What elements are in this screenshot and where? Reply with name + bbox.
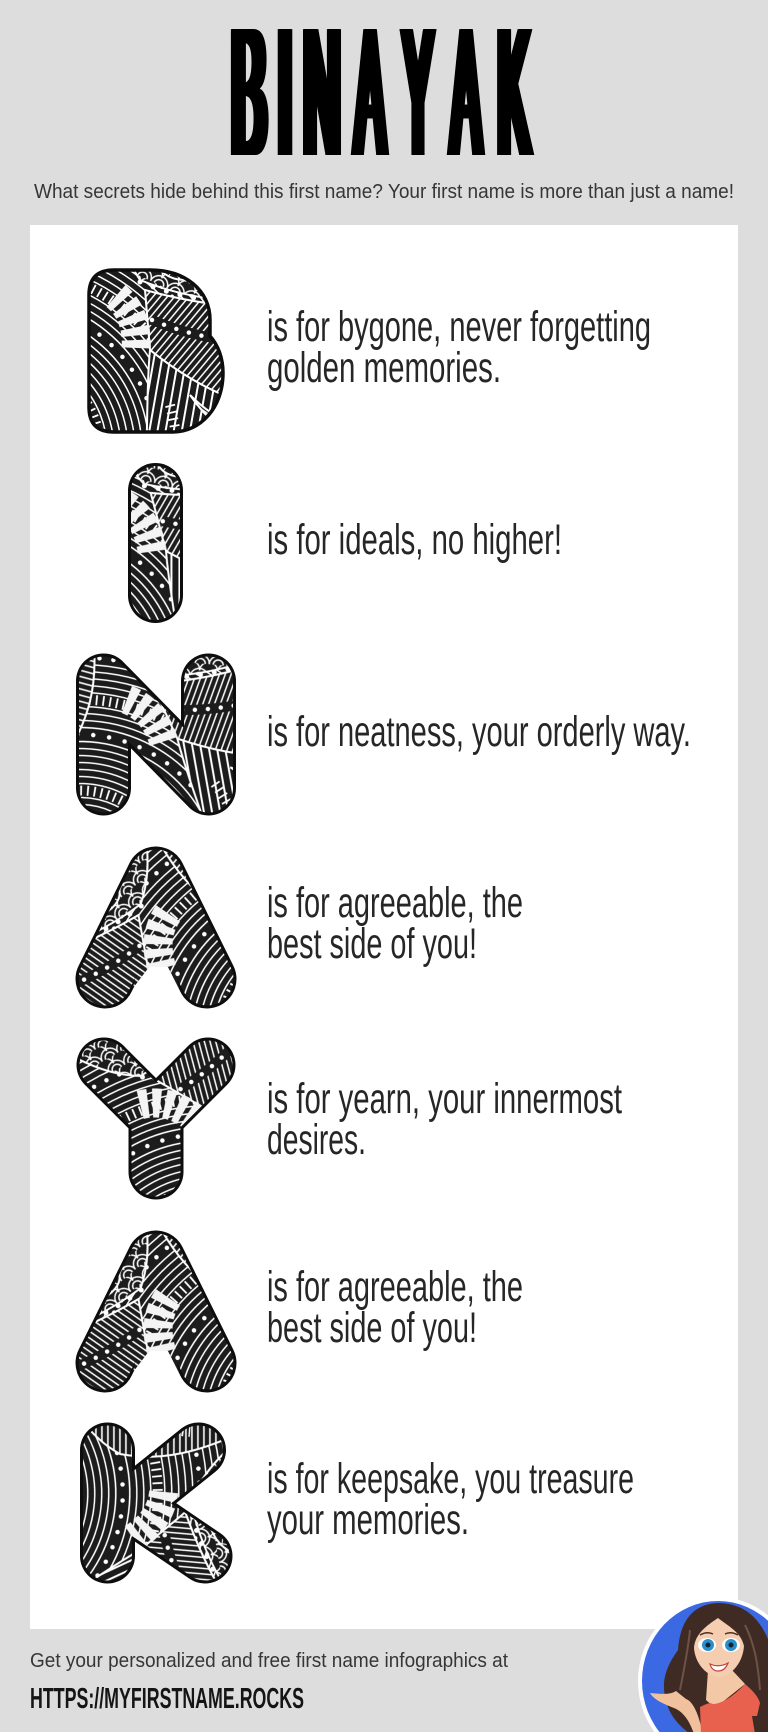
text: B line <box>267 303 651 392</box>
subtitle: What secrets hide behind this first name? Your first name is more than just a name! <box>34 181 734 203</box>
footer url: HTTPS://MYFIRSTNAME.ROCKS <box>30 1683 304 1715</box>
text: A line <box>267 879 523 968</box>
text: A line: is for agreeable, the <box>267 879 523 927</box>
text: K line <box>267 1455 634 1544</box>
icon: patterned letter B <box>89 270 223 432</box>
panel: white letters panel <box>30 225 738 1629</box>
text: K line: your memories. <box>267 1496 469 1544</box>
icon: patterned letter K <box>108 1450 205 1556</box>
text: A line: best side of you! <box>267 920 477 968</box>
text: Y line: desires. <box>267 1116 366 1164</box>
title <box>230 0 534 194</box>
text: B line: golden memories. <box>267 344 501 392</box>
text: second A line <box>267 1263 523 1352</box>
text: second A line: best side of you! <box>267 1304 477 1352</box>
icon: patterned letter A second <box>105 1260 207 1372</box>
icon: patterned letter Y <box>104 1065 208 1172</box>
text: Y line <box>267 1075 622 1164</box>
icon: avatar woman in blue circle <box>638 1597 768 1732</box>
icon: patterned letter N <box>104 681 208 788</box>
text: second A line: is for agreeable, the <box>267 1263 523 1311</box>
footer note: Get your personalized and free first name infographics at <box>30 1650 508 1672</box>
icon: patterned letter A <box>105 876 207 988</box>
icon: patterned letter I <box>154 490 156 596</box>
text: I line: is for ideals, no higher! <box>267 516 562 564</box>
